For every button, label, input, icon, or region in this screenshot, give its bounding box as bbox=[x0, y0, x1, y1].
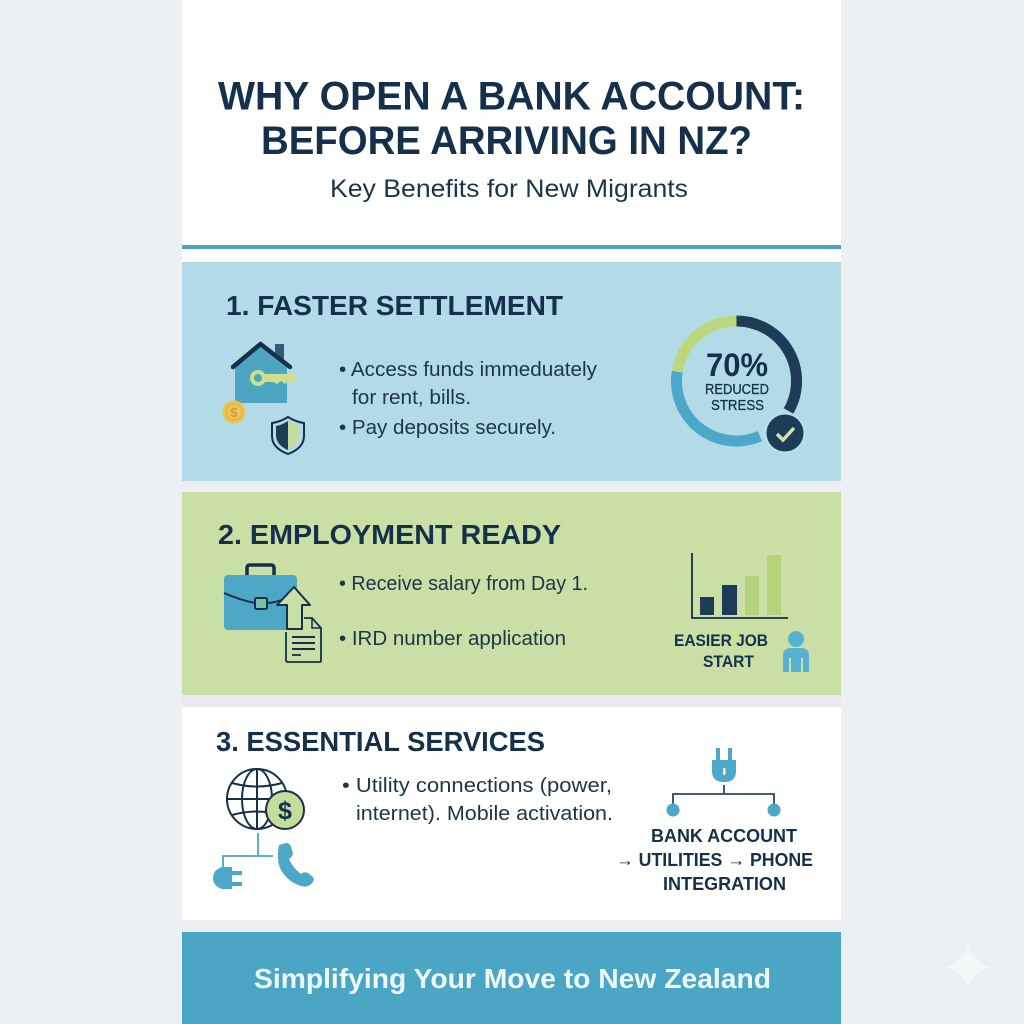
footer banner bbox=[182, 932, 841, 1024]
bullet text: for rent, bills. bbox=[352, 387, 471, 409]
donut chart: 70% reduced stress: REDUCED bbox=[705, 381, 769, 398]
subtitle: Key Benefits for New Migrants bbox=[330, 175, 688, 203]
bullet text bbox=[339, 359, 597, 439]
icon: house with key bbox=[233, 344, 296, 403]
icon: document bbox=[286, 618, 321, 662]
label: integration flow: → UTILITIES → PHONE bbox=[616, 849, 813, 870]
icon: phone bbox=[278, 843, 314, 887]
icon: shield bbox=[272, 417, 304, 454]
bullet text: internet). Mobile activation. bbox=[356, 803, 613, 825]
icon: plug bbox=[213, 867, 242, 889]
title bbox=[218, 74, 805, 163]
title: BEFORE ARRIVING IN NZ? bbox=[261, 119, 752, 163]
bar chart bbox=[692, 553, 788, 618]
bullet text: • Access funds immeduately bbox=[339, 359, 597, 381]
panel: employment ready bbox=[182, 492, 841, 695]
heading: employment ready: 2. EMPLOYMENT READY bbox=[218, 519, 561, 550]
label: easier job start bbox=[674, 632, 768, 671]
icon: person bbox=[783, 631, 809, 672]
icon: globe with dollar: $ bbox=[278, 797, 292, 825]
icon: sparkle bbox=[944, 943, 992, 991]
footer banner: Simplifying Your Move to New Zealand bbox=[254, 963, 771, 994]
title: WHY OPEN A BANK ACCOUNT: bbox=[218, 74, 805, 118]
bullet text bbox=[342, 775, 613, 825]
donut chart: 70% reduced stress: STRESS bbox=[711, 397, 764, 414]
donut chart: 70% reduced stress: 70% bbox=[706, 347, 768, 383]
label: easier job start: EASIER JOB bbox=[674, 632, 768, 650]
icon: check badge bbox=[764, 412, 806, 454]
panel: faster settlement bbox=[182, 262, 841, 481]
bullet text bbox=[339, 573, 588, 650]
heading: faster settlement: 1. FASTER SETTLEMENT bbox=[226, 290, 563, 321]
bullet text: • Pay deposits securely. bbox=[339, 417, 556, 439]
label: integration flow bbox=[616, 825, 813, 894]
label: integration flow: INTEGRATION bbox=[663, 873, 786, 894]
heading: essential services: 3. ESSENTIAL SERVICES bbox=[216, 726, 545, 757]
bullet text: • Utility connections (power, bbox=[342, 775, 612, 797]
connector lines bbox=[223, 833, 273, 868]
panel: essential services bbox=[182, 707, 841, 920]
icon: globe with dollar bbox=[227, 769, 304, 829]
label: integration flow: BANK ACCOUNT bbox=[651, 825, 798, 846]
diagram: plug tree bbox=[666, 748, 780, 816]
bullet text: • Receive salary from Day 1. bbox=[339, 573, 588, 595]
label: easier job start: START bbox=[703, 653, 754, 671]
bullet text: • IRD number application bbox=[339, 628, 566, 650]
icon: upload arrow bbox=[277, 587, 310, 629]
donut chart: 70% reduced stress bbox=[676, 321, 806, 454]
icon: coin: $ bbox=[230, 405, 238, 420]
icon: briefcase bbox=[224, 565, 298, 630]
icon: coin bbox=[222, 400, 246, 424]
header bbox=[218, 74, 805, 203]
